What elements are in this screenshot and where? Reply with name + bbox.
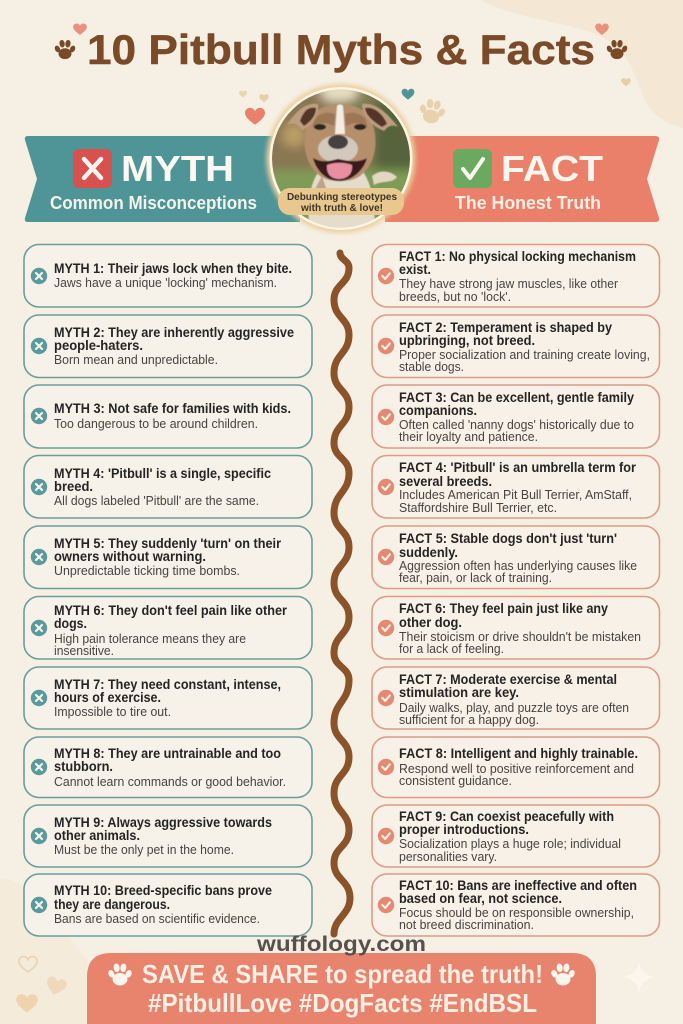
myth 9: Must be the only pet in the home. <box>54 842 234 857</box>
background blob: top right <box>481 0 683 128</box>
cta line 2: #PitbullLove #DogFacts #EndBSL <box>148 988 537 1018</box>
fact 4 <box>372 456 660 518</box>
fact 1: FACT 1: No physical locking mechanism <box>399 249 636 264</box>
myth 4: breed. <box>54 479 93 494</box>
fact 7 <box>372 667 660 729</box>
fact 1: exist. <box>399 262 431 277</box>
fact 7: FACT 7: Moderate exercise & mental <box>399 672 617 687</box>
myth 8: MYTH 8: They are untrainable and too <box>54 746 281 761</box>
fact 8: Respond well to positive reinforcement and <box>399 761 634 776</box>
myth 5: MYTH 5: They suddenly 'turn' on their <box>54 536 282 551</box>
fact heading: FACT <box>501 148 603 189</box>
call to action banner <box>87 953 596 1024</box>
myth 6: High pain tolerance means they are <box>54 631 246 646</box>
caption pill: with truth & love! <box>300 202 383 214</box>
fact ribbon <box>385 136 659 222</box>
dog body <box>308 170 374 232</box>
fact subtitle: The Honest Truth <box>455 193 601 213</box>
myth 8: Cannot learn commands or good behavior. <box>54 774 286 789</box>
myth 10: they are dangerous. <box>54 897 170 912</box>
myth 10 <box>24 874 312 936</box>
myth 5: owners without warning. <box>54 549 206 564</box>
fact 4: several breeds. <box>399 474 492 489</box>
fact 5: suddenly. <box>399 545 458 560</box>
fact 7: stimulation are key. <box>399 685 519 700</box>
myth 6 <box>24 596 312 659</box>
decorative hearts and paw around portrait <box>73 23 631 126</box>
banner: fact <box>385 136 659 222</box>
myth 10: Bans are based on scientific evidence. <box>54 911 260 926</box>
caption pill <box>278 188 404 215</box>
fact 9: personalities vary. <box>399 849 497 864</box>
caption pill: Debunking stereotypes <box>287 191 397 203</box>
fact 5: FACT 5: Stable dogs don't just 'turn' <box>399 531 617 546</box>
panel: myth column <box>24 244 312 936</box>
myth 10: MYTH 10: Breed-specific bans prove <box>54 883 272 898</box>
myth heading: MYTH <box>121 148 234 189</box>
fact 2: FACT 2: Temperament is shaped by <box>399 320 612 335</box>
myth 6: dogs. <box>54 616 87 631</box>
dog head <box>305 104 375 181</box>
fact 3: Often called 'nanny dogs' historically due to <box>399 417 634 432</box>
myth 7: MYTH 7: They need constant, intense, <box>54 677 281 692</box>
fact 5: fear, pain, or lack of training. <box>399 570 552 585</box>
myth ribbon <box>25 136 300 222</box>
watermark: wuffology.com: wuffology.com <box>256 933 426 956</box>
myth 4 <box>24 456 312 518</box>
myth 4: MYTH 4: 'Pitbull' is a single, specific <box>54 466 271 481</box>
fact 10 <box>372 874 660 936</box>
fact 9 <box>372 805 660 867</box>
fact 3 <box>372 385 660 448</box>
fact 6: Their stoicism or drive shouldn't be mistaken <box>399 629 641 644</box>
title text: 10 Pitbull Myths & Facts <box>87 26 595 73</box>
fact 3: companions. <box>399 403 477 418</box>
myth 9: other animals. <box>54 828 140 843</box>
myth 3 <box>24 385 312 448</box>
fact 5: Aggression often has underlying causes like <box>399 558 637 573</box>
fact 1: They have strong jaw muscles, like other <box>399 276 619 291</box>
fact 10: FACT 10: Bans are ineffective and often <box>399 878 637 893</box>
myth 8: stubborn. <box>54 759 113 774</box>
myth subtitle: Common Misconceptions <box>50 193 257 213</box>
icon: green check <box>453 149 492 188</box>
fact 7: sufficient for a happy dog. <box>399 712 539 727</box>
fact 3: FACT 3: Can be excellent, gentle family <box>399 390 634 405</box>
myth 5 <box>24 526 312 588</box>
myth 7: Impossible to tire out. <box>54 704 171 719</box>
background blob: bottom left <box>0 878 87 1024</box>
myth 3: MYTH 3: Not safe for families with kids. <box>54 401 291 416</box>
title <box>54 26 628 73</box>
decorative sparkle <box>623 961 655 993</box>
myth 1 <box>24 244 312 307</box>
dog eyes and nose <box>314 124 326 130</box>
icon: title paw left <box>54 40 76 59</box>
icon: cta paw right <box>550 963 576 985</box>
fact 7: Daily walks, play, and puzzle toys are often <box>399 700 629 715</box>
myth 3: Too dangerous to be around children. <box>54 416 258 431</box>
fact 8: FACT 8: Intelligent and highly trainable. <box>399 746 638 761</box>
myth 5: Unpredictable ticking time bombs. <box>54 563 240 578</box>
fact 10: Focus should be on responsible ownership, <box>399 905 634 920</box>
fact 6: for a lack of feeling. <box>399 641 504 656</box>
icon: title paw right <box>606 40 628 59</box>
fact 2: stable dogs. <box>399 359 464 374</box>
fact 3: their loyalty and patience. <box>399 429 538 444</box>
fact 10: not breed discrimination. <box>399 917 534 932</box>
fact 1: breeds, but no 'lock'. <box>399 289 511 304</box>
myth 2: MYTH 2: They are inherently aggressive <box>54 325 294 340</box>
fact 6: FACT 6: They feel pain just like any <box>399 601 608 616</box>
decorative hearts bottom left <box>16 957 68 1012</box>
banner: myth <box>25 136 300 222</box>
myth 6: MYTH 6: They don't feel pain like other <box>54 603 288 618</box>
fact 2: Proper socialization and training create loving, <box>399 347 650 362</box>
dog mouth <box>313 158 367 181</box>
myth 2: people-haters. <box>54 338 143 353</box>
fact 4: Staffordshire Bull Terrier, etc. <box>399 500 557 515</box>
fact 10: based on fear, not science. <box>399 891 562 906</box>
wavy center divider <box>334 253 350 934</box>
fact 8 <box>372 737 660 798</box>
fact 4: FACT 4: 'Pitbull' is an umbrella term for <box>399 460 637 475</box>
myth 7: hours of exercise. <box>54 690 161 705</box>
myth 4: All dogs labeled 'Pitbull' are the same. <box>54 493 259 508</box>
cta line 1: SAVE & SHARE to spread the truth! <box>142 959 543 989</box>
myth 1: Jaws have a unique 'locking' mechanism. <box>54 275 277 290</box>
dog ears <box>287 104 318 130</box>
fact 2: upbringing, not breed. <box>399 333 535 348</box>
myth 2 <box>24 315 312 378</box>
fact 9: proper introductions. <box>399 822 529 837</box>
fact 5 <box>372 526 660 588</box>
myth 9: MYTH 9: Always aggressive towards <box>54 815 272 830</box>
fact 9: Socialization plays a huge role; individual <box>399 836 621 851</box>
myth 7 <box>24 667 312 729</box>
fact 9: FACT 9: Can coexist peacefully with <box>399 809 614 824</box>
portrait: smiling pitbull <box>262 81 422 240</box>
fact 6: other dog. <box>399 615 462 630</box>
icon: cta paw left <box>107 963 133 985</box>
fact 6 <box>372 596 660 659</box>
fact 4: Includes American Pit Bull Terrier, AmStaff, <box>399 487 632 502</box>
panel: fact column <box>372 244 660 936</box>
myth 8 <box>24 737 312 798</box>
fact 8: consistent guidance. <box>399 773 512 788</box>
myth 1: MYTH 1: Their jaws lock when they bite. <box>54 261 292 276</box>
myth 6: insensitive. <box>54 643 114 658</box>
myth 2: Born mean and unpredictable. <box>54 352 218 367</box>
fact 2 <box>372 315 660 378</box>
fact 1 <box>372 244 660 307</box>
icon: red x <box>73 149 112 188</box>
myth 9 <box>24 805 312 867</box>
